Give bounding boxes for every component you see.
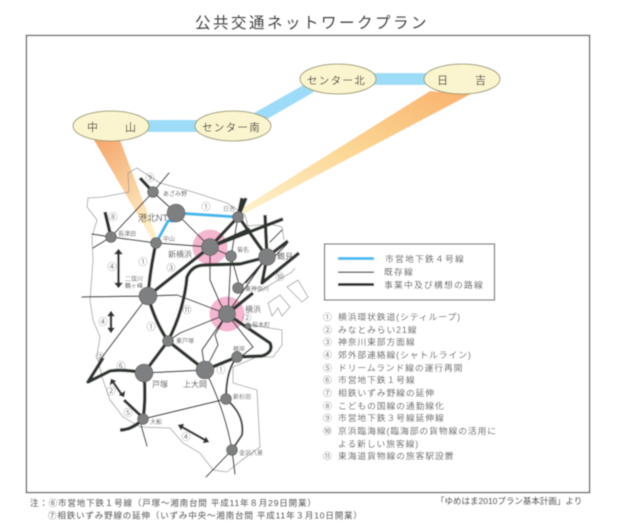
numbered plan list: 市営地下鉄３号線延伸線 — [338, 412, 445, 423]
station labels: 桜木町 — [252, 321, 270, 329]
station bubbles: センター北 — [307, 75, 366, 87]
circled line numbers: ④ — [107, 262, 117, 272]
circled line numbers: ① — [216, 365, 226, 375]
numbered plan list: 市営地下鉄１号線 — [338, 374, 416, 385]
double arrows — [108, 249, 209, 443]
numbered plan list — [323, 311, 497, 461]
numbered plan list: 郊外部連絡線(シャトルライン) — [338, 349, 472, 360]
main frame — [26, 36, 590, 492]
numbered plan list: ⑪ — [323, 451, 333, 461]
numbered plan list: ④ — [323, 350, 333, 360]
map outline — [87, 168, 308, 472]
planned lines — [88, 178, 299, 430]
station bubbles — [73, 64, 500, 141]
station labels: 上大岡 — [183, 379, 207, 389]
numbered plan list: ドリームランド線の運行再開 — [338, 362, 463, 373]
station labels: 横浜 — [245, 304, 261, 314]
station labels: 新杉田 — [233, 393, 251, 401]
numbered plan list: ⑦ — [323, 388, 333, 398]
circled line numbers: ⑧ — [108, 212, 118, 222]
circled line numbers: ⑥ — [116, 361, 126, 371]
numbered plan list: ⑧ — [323, 401, 333, 411]
station labels: 根岸 — [233, 345, 245, 353]
station labels: あざみ野 — [163, 190, 187, 198]
numbered plan list: よる新しい旅客線) — [338, 438, 419, 449]
circled line numbers: ⑨ — [145, 173, 155, 183]
station labels: 日吉 — [223, 206, 235, 213]
numbered plan list: みなとみらい21線 — [338, 324, 417, 335]
numbered plan list: ② — [323, 325, 333, 335]
pink station halos — [192, 230, 228, 264]
circled line numbers: ⑪ — [182, 305, 192, 315]
circled line numbers: ⑩ — [275, 272, 285, 282]
station labels: 長津田 — [118, 231, 136, 238]
numbered plan list: ③ — [323, 337, 333, 347]
station bubbles: センター南 — [202, 121, 261, 134]
circled line numbers: ④ — [98, 317, 108, 327]
station labels: 菊名 — [237, 246, 249, 254]
station labels: 新横浜 — [168, 249, 192, 259]
beam: Hiyoshi — [236, 91, 471, 216]
existing lines — [82, 173, 287, 477]
circled line numbers: ① — [138, 257, 148, 267]
numbered plan list: 神奈川東部方面線 — [338, 336, 416, 347]
station labels: 鶴見 — [277, 251, 293, 261]
legend box: 事業中及び構想の路線 — [384, 279, 484, 290]
station bubbles: 中 — [87, 121, 98, 134]
beam: Nakayama — [94, 140, 158, 241]
station bubbles: 山 — [125, 121, 136, 134]
station labels: 東戸塚 — [176, 337, 194, 345]
station labels: 中山 — [163, 235, 175, 243]
footnotes: 注：⑥市営地下鉄１号線（戸塚～湘南台間 平成11年８月29日開業） — [30, 498, 317, 508]
line 4 in map — [156, 213, 238, 243]
station labels — [118, 190, 293, 457]
numbered plan list: こどもの国線の通勤線化 — [338, 400, 445, 411]
legend box: 既存線 — [384, 266, 414, 277]
circled line numbers: ④ — [181, 432, 191, 442]
source note: 「ゆめはま2010プラン基本計画」より — [436, 496, 582, 506]
numbered plan list: 京浜臨海線(臨海部の貨物線の活用に — [338, 425, 497, 436]
circled line numbers: ② — [106, 386, 116, 396]
footnotes: ⑦相鉄いずみ野線の延伸（いずみ中央～湘南台間 平成11年３月10日開業） — [48, 510, 363, 520]
circled line numbers: ⑤ — [123, 408, 133, 418]
station labels: 戸塚 — [152, 380, 168, 389]
numbered plan list: 東海道貨物線の旅客駅設置 — [338, 450, 454, 461]
circled line numbers: ③ — [166, 263, 176, 273]
numbered plan list: ⑨ — [323, 413, 333, 423]
numbered plan list: ⑤ — [323, 363, 333, 373]
numbered plan list: 横浜環状鉄道(シティループ) — [338, 311, 461, 322]
station bubbles: 日 — [437, 75, 448, 87]
numbered plan list: ⑥ — [323, 375, 333, 385]
numbered plan list: 相鉄いずみ野線の延伸 — [338, 387, 435, 398]
legend box: 市営地下鉄４号線 — [385, 253, 465, 264]
numbered plan list: ① — [323, 312, 333, 322]
numbered plan list: ⑩ — [323, 426, 333, 436]
line 4 connectors — [146, 73, 427, 132]
circled line numbers: ② — [242, 313, 252, 323]
title: 公共交通ネットワークプラン — [195, 14, 429, 32]
circled line numbers: ⑦ — [95, 352, 105, 362]
station labels: 港北NT — [138, 212, 168, 223]
circled line numbers: ① — [201, 202, 211, 212]
station labels: 大船 — [150, 418, 162, 426]
station labels: 東神奈川 — [245, 285, 269, 293]
medium lines — [226, 357, 242, 450]
station bubbles: 吉 — [475, 74, 486, 87]
station labels: 金沢八景 — [239, 449, 263, 457]
circled line numbers — [95, 173, 285, 442]
station labels: 鶴ヶ峰 — [125, 282, 143, 290]
stations — [106, 186, 276, 456]
circled line numbers: ① — [146, 322, 156, 332]
footnotes — [30, 498, 363, 520]
legend box — [324, 244, 494, 300]
station labels: 二俣川 — [125, 275, 143, 283]
